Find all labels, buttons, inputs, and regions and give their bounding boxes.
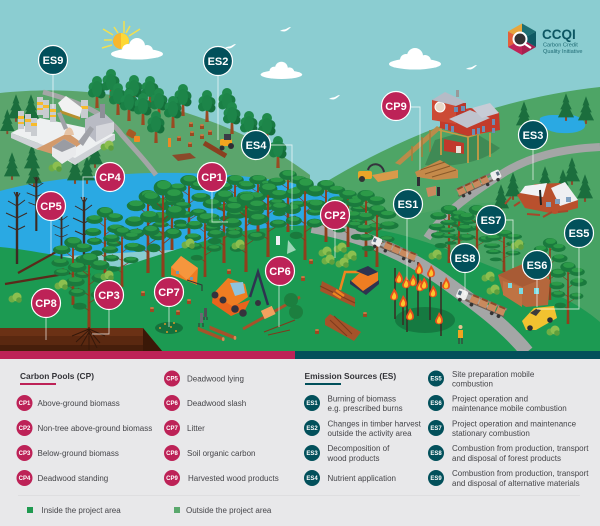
- badge: ES4: [242, 130, 270, 160]
- badge: CP5: CP5: [40, 201, 62, 213]
- concrete plant: [11, 96, 115, 165]
- badge: ES3: ES3: [523, 130, 543, 142]
- badge: CP8: [32, 288, 60, 318]
- badge: CP3: CP3: [98, 290, 120, 302]
- log trucks: [370, 169, 507, 320]
- heading: emission sources: Emission Sources (ES): [304, 371, 396, 381]
- badge: CP9: CP9: [385, 101, 407, 113]
- badge: CP7: [154, 278, 184, 306]
- item CP4: CP4: [19, 476, 31, 482]
- pond: [540, 115, 585, 133]
- item CP7: Litter: [187, 424, 205, 433]
- item ES3: Decomposition of: [328, 444, 390, 453]
- badge: ES8: [450, 244, 480, 272]
- log cabin: [498, 263, 550, 307]
- sawmill: [395, 90, 500, 166]
- badge: ES1: [394, 190, 422, 218]
- item ES9: ES9: [430, 476, 442, 482]
- tree roots: [72, 327, 105, 350]
- item ES8: ES8: [430, 451, 442, 457]
- item CP9: Harvested wood products: [188, 474, 279, 483]
- badge: CP2: CP2: [324, 210, 346, 222]
- item CP8: CP8: [166, 451, 178, 457]
- key: inside the project area: Inside the project area: [42, 506, 121, 515]
- item ES1: e.g. prescribed burns: [328, 404, 403, 413]
- item ES5: ES5: [430, 376, 442, 382]
- fallen deadwood: [5, 252, 70, 284]
- felled tree and slash: [243, 293, 303, 335]
- badge: CP3: [94, 280, 124, 310]
- lake: [0, 173, 340, 260]
- item ES6: maintenance mobile combustion: [452, 404, 567, 413]
- item ES1: ES1: [306, 401, 318, 407]
- item CP1: [16, 395, 120, 411]
- item ES7: stationary combustion: [452, 429, 530, 438]
- badge: CP2: [320, 200, 350, 230]
- logo: CCQI: Carbon Credit: [543, 42, 578, 48]
- badge: ES9: [38, 46, 68, 74]
- foreground ground: [0, 225, 600, 352]
- logo: CCQI: [508, 24, 582, 55]
- item CP7: CP7: [166, 426, 178, 432]
- sawn log pile at the mill: [415, 160, 458, 180]
- workers at the mill: [417, 177, 440, 197]
- item ES6: [428, 394, 567, 413]
- item ES9: [428, 469, 589, 488]
- item CP3: CP3: [19, 451, 31, 457]
- right hill: [290, 87, 600, 352]
- item CP5: [164, 370, 244, 386]
- collapsed house: [505, 182, 578, 217]
- excavator and log pile: [320, 266, 379, 307]
- item ES2: Changes in timber harvest: [328, 420, 422, 428]
- connector lines: [46, 75, 579, 340]
- firefighter: [458, 325, 463, 344]
- item ES4: ES4: [306, 476, 318, 482]
- badge: ES2: [204, 46, 232, 76]
- forestry workers: [199, 236, 296, 327]
- item ES7: ES7: [430, 426, 442, 432]
- badge: ES6: [522, 250, 552, 280]
- item CP7: [164, 420, 205, 436]
- bushes: [8, 140, 560, 336]
- item CP8: Soil organic carbon: [187, 449, 255, 458]
- item ES4: [304, 470, 396, 486]
- forest pines back row: [150, 170, 348, 260]
- item ES5: combustion: [452, 380, 493, 388]
- legend colour bars: [0, 351, 600, 359]
- logo: CCQI: Quality Initiative: [543, 49, 582, 55]
- sun: [102, 21, 140, 49]
- item CP2: [16, 420, 152, 436]
- yellow pickup: [522, 306, 557, 331]
- panel: carbon pools legend: [16, 370, 279, 486]
- harvester: [212, 272, 268, 317]
- item CP8: [164, 445, 255, 461]
- badge: CP4: [96, 162, 124, 192]
- round trees on left hill: [88, 69, 286, 168]
- badge: CP7: CP7: [158, 287, 180, 299]
- badge: CP5: [36, 192, 66, 220]
- key: outside the project area: Outside the project area: [186, 506, 272, 515]
- legend background: [0, 359, 600, 526]
- lower right hill: [340, 199, 600, 352]
- item ES6: ES6: [430, 401, 442, 407]
- item CP4: Deadwood standing: [38, 474, 108, 483]
- item ES7: [428, 420, 577, 438]
- item CP2: Non-tree above-ground biomass: [38, 424, 152, 433]
- item CP3: Below-ground biomass: [38, 449, 119, 458]
- roads: [43, 92, 600, 352]
- item CP9: CP9: [166, 476, 178, 482]
- item ES8: [428, 444, 589, 463]
- badge: ES4: ES4: [246, 140, 267, 152]
- stacked logs: [325, 314, 361, 341]
- item ES3: wood products: [326, 454, 380, 463]
- item ES2: ES2: [306, 426, 318, 432]
- item CP9: [164, 470, 279, 486]
- item CP5: Deadwood lying: [187, 374, 244, 384]
- small orange truck: [126, 128, 140, 142]
- badge: ES5: [564, 218, 594, 248]
- conifers: [0, 93, 594, 212]
- badge: CP1: CP1: [201, 172, 223, 184]
- item ES7: Project operation and maintenance: [452, 420, 577, 428]
- dirt cross section: [0, 328, 162, 351]
- item CP6: Deadwood slash: [187, 399, 246, 408]
- item ES1: [304, 394, 403, 413]
- badge: ES3: [518, 120, 548, 150]
- item CP4: [16, 470, 108, 486]
- item CP3: [16, 445, 119, 461]
- forest pines middle row: [85, 180, 524, 287]
- left hill: [0, 90, 310, 200]
- dead trees: [6, 177, 94, 269]
- sky: [0, 0, 600, 352]
- item CP5: CP5: [166, 376, 178, 382]
- item ES6: Project operation and: [452, 394, 528, 404]
- panel: emission sources legend: [304, 370, 589, 488]
- orange cabin trailer: [171, 256, 202, 291]
- badge: ES9: ES9: [43, 55, 63, 67]
- badge: ES5: ES5: [569, 228, 589, 240]
- birds: [225, 27, 477, 99]
- logo: CCQI: CCQI: [542, 27, 576, 42]
- item ES2: outside the activity area: [328, 429, 412, 438]
- badge: ES7: [476, 206, 506, 234]
- badge: CP1: [198, 162, 226, 192]
- badge: ES8: ES8: [455, 253, 475, 265]
- item ES2: [304, 420, 422, 438]
- clouds: [111, 38, 441, 79]
- badge: ES2: ES2: [208, 56, 228, 68]
- badge: ES7: ES7: [481, 215, 501, 227]
- item ES3: [304, 444, 390, 463]
- badge: ES6: ES6: [527, 260, 547, 272]
- badge: ES1: ES1: [398, 199, 418, 211]
- foreground pines: [51, 237, 587, 329]
- badge: CP6: CP6: [269, 266, 291, 278]
- item CP1: CP1: [19, 401, 31, 407]
- item ES1: Burning of biomass: [328, 394, 396, 404]
- litter pile: [155, 322, 183, 334]
- item ES5: [428, 370, 535, 388]
- badge: CP4: CP4: [99, 172, 122, 184]
- badge: CP6: [266, 256, 294, 286]
- badge: CP9: [382, 92, 410, 120]
- item CP6: CP6: [166, 401, 178, 407]
- item CP2: CP2: [19, 426, 31, 432]
- illustrated landscape scene: [0, 0, 600, 352]
- felled area: stumps, logs and loader: [168, 122, 234, 161]
- item ES9: and disposal of alternative materials: [452, 479, 580, 488]
- item CP1: Above-ground biomass: [38, 399, 120, 408]
- item ES4: Nutrient application: [328, 474, 396, 483]
- item ES5: Site preparation mobile: [452, 370, 535, 379]
- badge: CP8: CP8: [35, 298, 57, 310]
- item ES3: ES3: [306, 451, 318, 457]
- item ES8: Combustion from production, transport: [452, 444, 589, 453]
- item ES9: Combustion from production, transport: [452, 469, 589, 478]
- burning trees: [390, 262, 455, 336]
- item ES8: and disposal of forest products: [452, 454, 561, 463]
- logs and stumps in the foreground: [141, 259, 367, 341]
- item CP6: [164, 395, 246, 411]
- heading: carbon pools: Carbon Pools (CP): [20, 371, 94, 381]
- loader machine: [358, 164, 398, 182]
